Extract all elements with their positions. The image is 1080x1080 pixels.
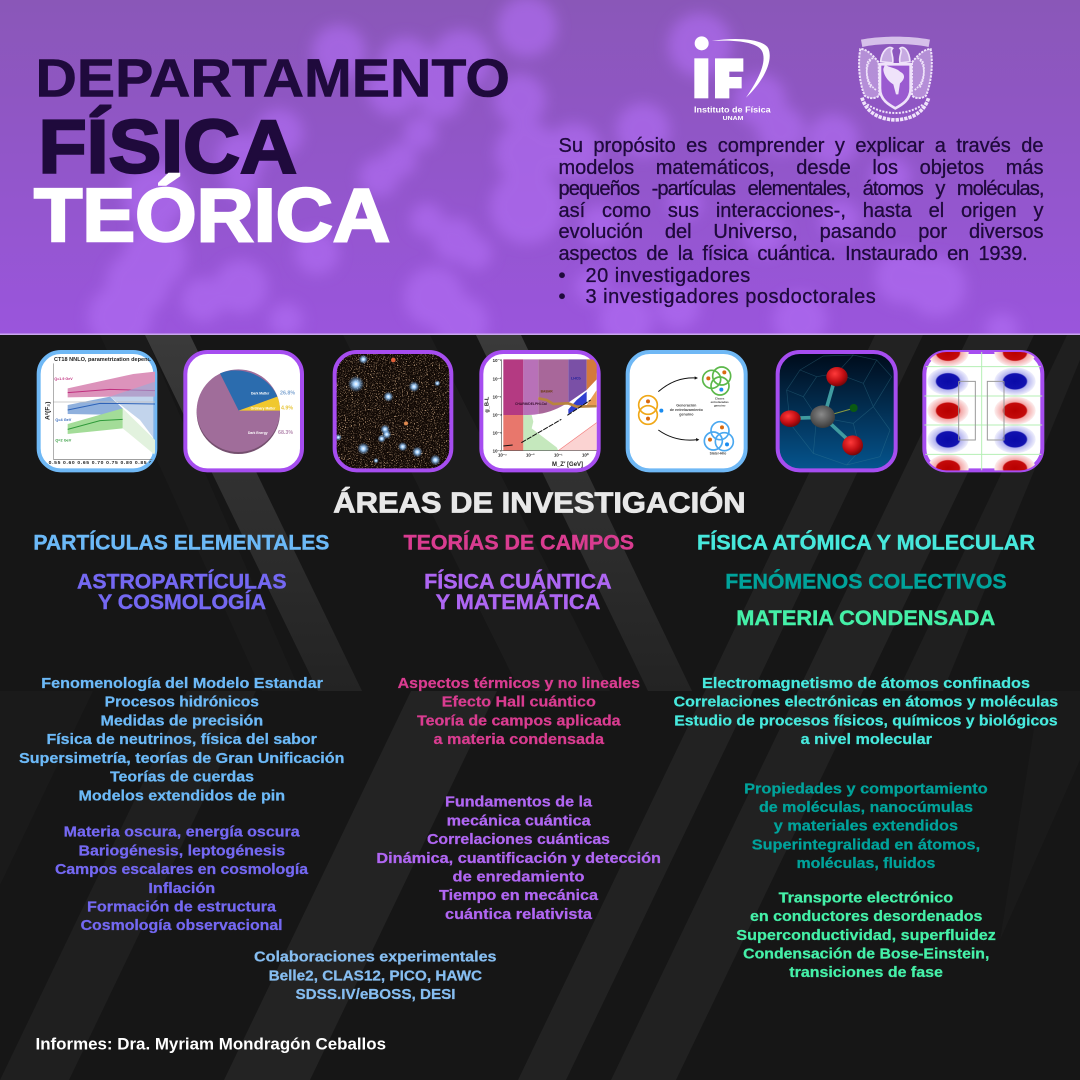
topic list: condensed matter: transiciones de fase	[789, 965, 943, 981]
topic list: elementary particles: Modelos extendidos de pin	[78, 788, 285, 804]
thumbnail: dark matter pie chart: 4.9%	[281, 405, 293, 411]
text block: department description: aspectos de la física cuántica. Instaurado en 1939.	[558, 243, 1028, 265]
text block: department description: modelos matemáticos, desde los objetos más	[558, 157, 1044, 179]
thumbnail: dark matter pie chart: Ordinary Matter	[251, 406, 276, 410]
thumbnail: entanglement diagram: Clases	[715, 397, 725, 401]
thumbnail: exclusion limits plot: CHARM/DELPHI-Cal	[515, 402, 547, 406]
topic list: condensed matter: Condensación de Bose-Einstein,	[743, 946, 989, 962]
topic list: field theories	[398, 676, 640, 748]
thumbnail: exclusion limits plot: 10⁻²	[493, 376, 502, 381]
thumbnail: entanglement diagram: entrelazadas	[711, 400, 729, 404]
column headings: middle	[404, 531, 634, 614]
topic list: elementary particles: Procesos hidrónicos	[105, 695, 259, 711]
logo: Instituto de Física UNAM: Instituto de Física	[694, 105, 771, 114]
column headings: middle: TEORÍAS DE CAMPOS	[404, 531, 634, 554]
column headings: left	[33, 531, 330, 614]
topic list: astroparticles and cosmology: Bariogénesis, leptogénesis	[78, 843, 285, 859]
thumbnail: PDF parametrization chart: 0.55 0.60 0.65 0.70 0.75 0.80 0.85 0	[49, 460, 152, 466]
topic list: astroparticles and cosmology: Inflación	[148, 881, 215, 897]
topic list: atomic and molecular physics: Estudio de procesos físicos, químicos y biológicos	[674, 713, 1058, 729]
topic list: quantum and mathematical physics: Dinámica, cuantificación y detección	[376, 851, 661, 867]
thumbnail: PDF parametrization chart: Q=4 GeV	[55, 418, 72, 422]
topic list: astroparticles and cosmology: Cosmología observacional	[81, 918, 283, 934]
thumbnail: entanglement diagram: genuino	[679, 412, 694, 416]
topic list: field theories: Efecto Hall cuántico	[442, 695, 596, 711]
topic list: field theories: Aspectos térmicos y no lineales	[398, 676, 640, 692]
text block: department description: •	[558, 286, 566, 308]
thumbnail: star field	[335, 352, 451, 470]
thumbnail: entanglement diagram	[628, 352, 746, 470]
topic list: collective phenomena: Superintegralidad en átomos,	[752, 837, 980, 853]
column headings: right: FENÓMENOS COLECTIVOS	[725, 570, 1007, 594]
topic list: quantum and mathematical physics: mecánica cuántica	[447, 813, 592, 829]
topic list: collective phenomena: y materiales extendidos	[774, 819, 958, 835]
thumbnail: dark matter pie chart: Dark Energy	[248, 431, 268, 435]
topic list: collective phenomena	[744, 781, 988, 872]
thumbnail: entanglement diagram: Slater-Hilo	[710, 452, 726, 456]
topic list: experimental collaborations: Colaboraciones experimentales	[254, 950, 496, 966]
column headings: left: PARTÍCULAS ELEMENTALES	[33, 531, 330, 554]
thumbnail: exclusion limits plot: 10⁰	[582, 452, 589, 457]
title: TEÓRICA	[34, 173, 390, 258]
topic list: experimental collaborations: SDSS.IV/eBOSS, DESI	[296, 987, 456, 1003]
topic list: elementary particles	[19, 676, 344, 804]
text block: department description: 3 investigadores posdoctorales	[586, 286, 876, 308]
topic list: condensed matter	[736, 890, 996, 981]
topic list: astroparticles and cosmology: Materia oscura, energía oscura	[64, 825, 301, 841]
contact line: Informes: Dra. Myriam Mondragón Ceballos	[36, 1036, 386, 1054]
topic list: collective phenomena: de moléculas, nanocúmulas	[759, 800, 973, 816]
thumbnail: PDF parametrization chart: Q=1.9 GeV	[54, 377, 73, 381]
thumbnail: entanglement diagram: genuino	[714, 403, 726, 407]
panel: purple header with molecule background	[0, 0, 1080, 350]
thumbnail: exclusion limits plot: 10⁻²	[526, 452, 535, 457]
logo: UNAM shield	[859, 37, 932, 120]
topic list: atomic and molecular physics	[674, 676, 1058, 748]
logo: Instituto de Física UNAM: UNAM	[723, 116, 744, 122]
thumbnail: dark matter pie chart: Dark Matter	[251, 391, 270, 395]
topic list: astroparticles and cosmology: Formación de estructura	[87, 900, 277, 916]
topic list: atomic and molecular physics: a nivel molecular	[801, 732, 932, 748]
thumbnail: PDF parametrization chart: Q=2 GeV	[55, 438, 72, 442]
panel: dark background with diagonal stripes	[0, 334, 1080, 1080]
thumbnail: exclusion limits plot: M_Z′ [GeV]	[552, 462, 583, 468]
topic list: field theories: Teoría de campos aplicada	[417, 713, 622, 729]
topic list: quantum and mathematical physics: cuántica relativista	[445, 907, 593, 923]
thumbnail: exclusion limits plot	[481, 352, 599, 470]
thumbnail: orbital density map	[922, 350, 1044, 472]
topic list: quantum and mathematical physics: Correlaciones cuánticas	[427, 832, 610, 848]
topic list: elementary particles: Supersimetría, teorías de Gran Unificación	[19, 751, 344, 767]
thumbnail: entanglement diagram: Generación	[676, 404, 696, 408]
topic list: experimental collaborations: Belle2, CLAS12, PICO, HAWC	[269, 968, 482, 984]
thumbnail: exclusion limits plot: g_B-L	[484, 396, 490, 413]
thumbnail: PDF parametrization chart: CT18 NNLO, parametrization depende	[54, 357, 154, 363]
topic list: elementary particles: Teorías de cuerdas	[110, 770, 254, 786]
logo: Instituto de Física UNAM	[694, 36, 771, 122]
column headings: right: MATERIA CONDENSADA	[736, 607, 995, 630]
title: FÍSICA	[38, 105, 297, 190]
column headings: right: FÍSICA ATÓMICA Y MOLECULAR	[697, 530, 1035, 554]
thumbnail: exclusion limits plot: 10⁻⁵	[493, 431, 502, 436]
text block: department description: 20 investigadores	[586, 265, 751, 287]
topic list: field theories: a materia condensada	[434, 732, 605, 748]
topic list: quantum and mathematical physics: de enredamiento	[452, 870, 585, 886]
topic list: condensed matter: Superconductividad, superfluidez	[736, 928, 996, 944]
column headings: left: ASTROPARTÍCULAS	[77, 571, 287, 594]
text block: department description: •	[558, 265, 566, 287]
topic list: atomic and molecular physics: Correlaciones electrónicas en átomos y moléculas	[674, 695, 1058, 711]
topic list: atomic and molecular physics: Electromagnetismo de átomos confinados	[702, 676, 1030, 692]
thumbnail: entanglement diagram: de entrelazamiento	[670, 408, 704, 412]
column headings: right	[697, 530, 1035, 630]
thumbnail: PDF parametrization chart: A²(F₂)	[44, 402, 51, 420]
topic list: quantum and mathematical physics: Tiempo en mecánica	[439, 888, 599, 904]
column headings: left: Y COSMOLOGÍA	[98, 591, 266, 614]
title: DEPARTAMENTO	[36, 49, 510, 109]
topic list: elementary particles: Física de neutrinos, física del sabor	[46, 732, 317, 748]
topic list: experimental collaborations	[254, 950, 496, 1003]
topic list: collective phenomena: Propiedades y comportamiento	[744, 781, 988, 797]
thumbnail: exclusion limits plot: 10⁻⁴	[493, 413, 502, 418]
column headings: middle: FÍSICA CUÁNTICA	[424, 571, 612, 594]
thumbnail: dark matter pie chart: 26.8%	[280, 390, 295, 396]
topic list: quantum and mathematical physics: Fundamentos de la	[445, 795, 593, 811]
text block: department description: pequeños -partículas elementales, átomos y moléculas,	[558, 178, 1044, 200]
title	[34, 49, 510, 258]
text block: department description: así como sus interacciones-, hasta el origen y	[558, 200, 1044, 222]
thumbnail: PDF parametrization chart	[39, 352, 155, 470]
thumbnail: molecule in fullerene cage	[778, 352, 896, 470]
topic list: elementary particles: Fenomenología del Modelo Estandar	[41, 676, 323, 692]
topic list: astroparticles and cosmology	[55, 825, 309, 934]
heading: research areas: ÁREAS DE INVESTIGACIÓN	[333, 485, 746, 519]
topic list: elementary particles: Medidas de precisión	[100, 713, 263, 729]
thumbnail: exclusion limits plot: 10⁻¹	[493, 358, 502, 363]
thumbnail: dark matter pie chart	[185, 352, 302, 470]
text block: department description: Su propósito es comprender y explicar a través de	[558, 135, 1044, 157]
thumbnail: exclusion limits plot: BABAR	[541, 389, 553, 393]
topic list: astroparticles and cosmology: Campos escalares en cosmología	[55, 862, 309, 878]
thumbnail: exclusion limits plot: 10⁻³	[498, 452, 507, 457]
text block: department description: evolución del Universo, pasando por diversos	[558, 221, 1044, 243]
topic list: collective phenomena: moléculas, fluidos	[796, 856, 935, 872]
topic list: condensed matter: Transporte electrónico	[779, 890, 953, 906]
thumbnail: exclusion limits plot: 10⁻³	[493, 394, 502, 399]
thumbnail: exclusion limits plot: 10⁻¹	[554, 452, 563, 457]
topic list: condensed matter: en conductores desordenados	[750, 909, 982, 925]
thumbnail: exclusion limits plot: LHCb	[571, 377, 582, 381]
topic list: quantum and mathematical physics	[376, 795, 661, 923]
thumbnail: dark matter pie chart: 68.3%	[278, 430, 293, 436]
text block: department description	[558, 135, 1044, 308]
column headings: middle: Y MATEMÁTICA	[436, 591, 600, 614]
thumbnail: exclusion limits plot: 10⁻⁶	[493, 448, 502, 453]
